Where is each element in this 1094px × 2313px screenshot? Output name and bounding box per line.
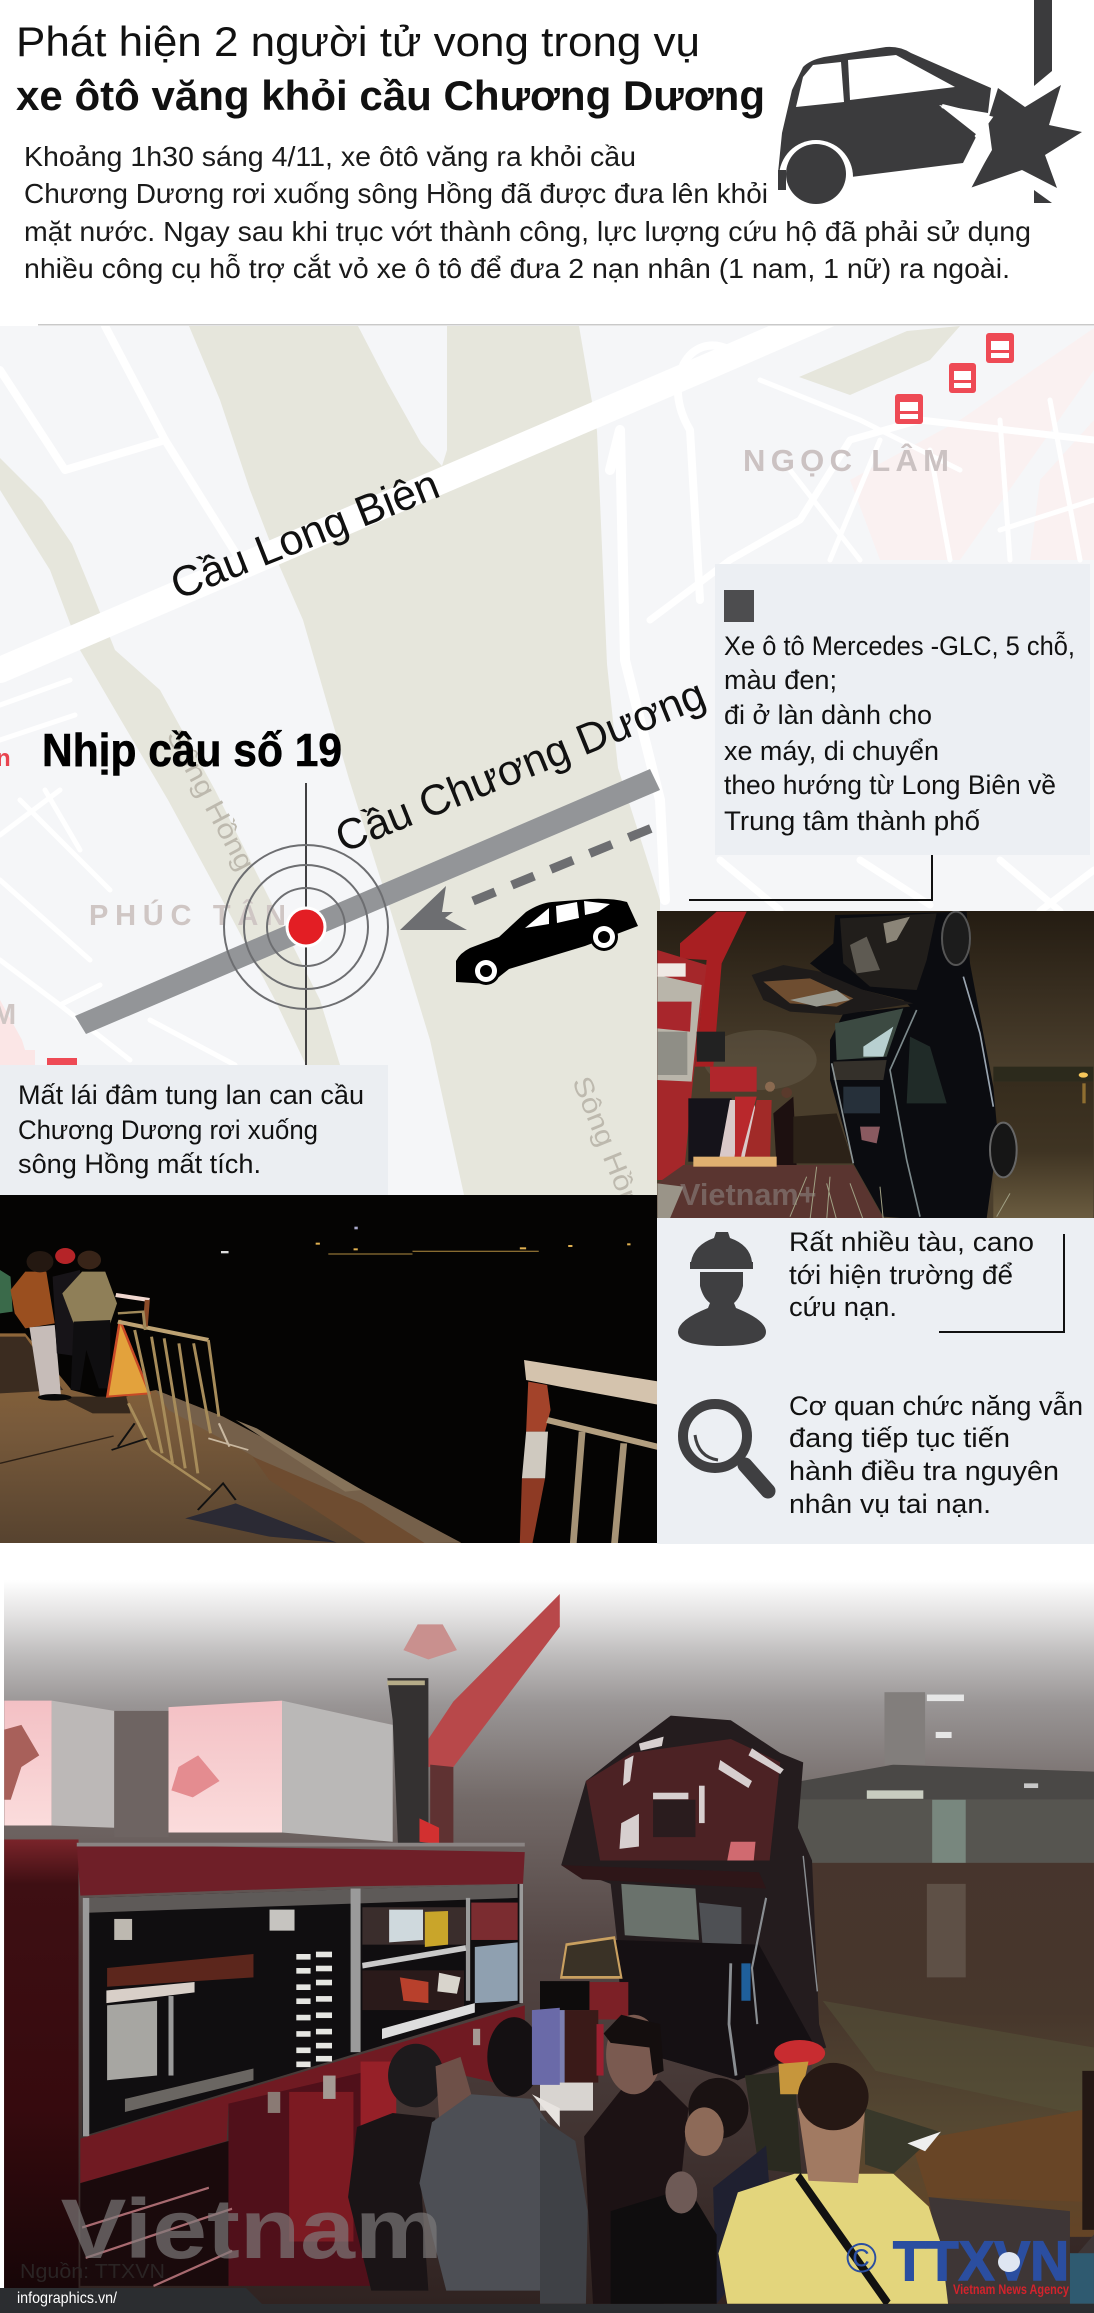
- divider: [38, 324, 1094, 326]
- photo: rescue crew and fire truck: [4, 1580, 1094, 2313]
- callout text: Xe ô tô Mercedes -GLC, 5 chỗ,: [724, 630, 1075, 661]
- sign: [107, 1320, 149, 1397]
- text: rescue boats: tới hiện trường để: [789, 1260, 1013, 1290]
- panel: rescue and investigation: [657, 1218, 1094, 1544]
- river scene: [794, 1692, 1094, 2304]
- callout text: Trung tâm thành phố: [724, 806, 980, 836]
- marker: impact rings: [224, 783, 388, 1066]
- intro text block: [24, 141, 1031, 284]
- label: Ngọc Lâm: NGỌC LÂM: [743, 442, 949, 478]
- logo: TTXVN: TTXVN: [893, 2229, 1069, 2292]
- text: investigation: đang tiếp tục tiến: [789, 1423, 1010, 1453]
- footer bar: [0, 2288, 1094, 2313]
- car body: [810, 912, 1017, 1220]
- crowd left: Vietnam: [61, 2181, 443, 2276]
- title: [16, 18, 765, 119]
- callout text: xe máy, di chuyển: [724, 736, 939, 766]
- panel: map: [0, 326, 1094, 1195]
- connector: callout to photo: [689, 855, 932, 900]
- arrow: direction of travel: [400, 828, 652, 930]
- crowd left: [61, 2008, 560, 2291]
- label: Cau Chuong Duong: Cầu Chương Dương: [329, 670, 712, 862]
- label: cropped map letters: [0, 753, 14, 1024]
- road label: Sông Hồng left: Sông Hồng: [161, 724, 260, 876]
- label: Cau Long Bien: Cầu Long Biên: [164, 461, 446, 609]
- text: rescue boats: cứu nạn.: [789, 1292, 897, 1322]
- right railing: [524, 1360, 660, 1405]
- footer link: infographics.vn/: [17, 2290, 117, 2307]
- roads: [0, 326, 1094, 1065]
- intro text block: Khoảng 1h30 sáng 4/11, xe ôtô văng ra khỏi cầu: [24, 141, 636, 172]
- intro text block: nhiều công cụ hỗ trợ cắt vỏ xe ô tô để đưa 2 nạn nhân (1 nam, 1 nữ) ra ngoài.: [24, 253, 1010, 284]
- barrier: [116, 1295, 219, 1490]
- title: xe ôtô văng khỏi cầu Chương Dương: [16, 72, 765, 119]
- text: rescue boats: [789, 1227, 1034, 1322]
- icon: bus stops: [47, 333, 1014, 1066]
- icon: black car: [456, 899, 638, 985]
- source credit: Nguồn: TTXVN: [20, 2261, 165, 2283]
- logo: TTXVN: [846, 2240, 1069, 2297]
- callout: loss of control: Mất lái đâm tung lan can cầu: [18, 1080, 364, 1110]
- pale red district: [0, 1000, 35, 1065]
- text: investigation: hành điều tra nguyên: [789, 1456, 1059, 1486]
- road label: Sông Hồng right: Sông Hồng: [566, 1072, 653, 1228]
- bridge: Chuong Duong: [75, 769, 660, 1034]
- crowd right: [540, 2015, 948, 2304]
- photo: car lifted by crane: Vietnam+: [680, 1178, 817, 1212]
- icon: car crash: [778, 0, 1082, 214]
- text: rescue boats: Rất nhiều tàu, cano: [789, 1227, 1034, 1257]
- fire truck: [4, 1594, 560, 2288]
- callout text: đi ở làn dành cho: [724, 700, 932, 730]
- wrecked car: [540, 1716, 826, 2111]
- swatch: [724, 590, 754, 622]
- callout text: màu đen;: [724, 665, 837, 695]
- callout: car details: [715, 564, 1090, 855]
- connector: text bracket: [939, 1234, 1064, 1332]
- text: investigation: nhân vụ tai nạn.: [789, 1489, 991, 1519]
- text: investigation: Cơ quan chức năng vẫn: [789, 1390, 1083, 1421]
- road surface: [0, 1333, 461, 1543]
- logo: TTXVN: ©: [846, 2234, 877, 2281]
- photo: broken railing at night: [0, 1190, 660, 1550]
- intro text block: mặt nước. Ngay sau khi trục vớt thành công, lực lượng cứu hộ đã phải sử dụng: [24, 216, 1031, 247]
- callout: loss of control: [0, 1065, 388, 1195]
- icon: magnifier: [683, 1404, 768, 1491]
- people: [0, 1270, 13, 1313]
- intro text block: Chương Dương rơi xuống sông Hồng đã được đưa lên khỏi: [24, 178, 768, 209]
- text: investigation: [789, 1390, 1083, 1519]
- title: Phát hiện 2 người tử vong trong vụ: [16, 18, 700, 65]
- heading: span 19: Nhịp cầu số 19: [42, 724, 342, 776]
- label: Phúc Tân: PHÚC TÂN: [89, 898, 286, 932]
- river areas: [0, 326, 960, 1195]
- callout text: theo hướng từ Long Biên về: [724, 770, 1056, 800]
- callout: loss of control: Chương Dương rơi xuống: [18, 1115, 318, 1145]
- callout text: [724, 630, 1075, 836]
- photo: car lifted by crane: [657, 910, 1094, 1222]
- callout: loss of control: sông Hồng mất tích.: [18, 1149, 261, 1179]
- icon: rescue worker: [678, 1232, 766, 1346]
